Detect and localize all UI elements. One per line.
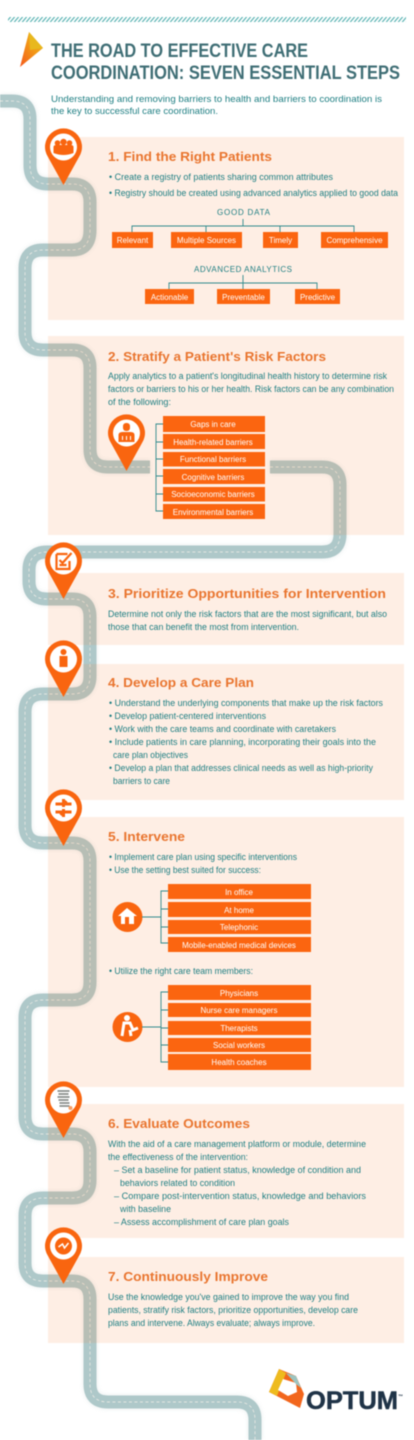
step 7 body: plans and intervene. Always evaluate; always improve. — [108, 1318, 315, 1328]
pin 1: patients icon — [45, 128, 82, 185]
step 1 bullets: • Registry should be created using advanced analytics applied to good data — [109, 188, 398, 198]
intro text: the key to successful care coordination. — [51, 106, 218, 116]
settings list — [142, 884, 311, 952]
advanced analytics chart — [145, 265, 340, 304]
risk factor list: Gaps in care — [190, 420, 236, 429]
step 3 body — [108, 609, 387, 632]
step 6 body — [108, 1139, 367, 1227]
settings list: Mobile-enabled medical devices — [182, 941, 296, 950]
step 1 — [108, 149, 398, 304]
intro text — [51, 94, 382, 116]
risk factor list: Environmental barriers — [173, 508, 253, 517]
step 5 bullets — [109, 852, 298, 976]
step 6 — [108, 1116, 367, 1227]
step 3 — [108, 586, 387, 632]
step 5 bullets: • Implement care plan using specific interventions — [109, 852, 298, 862]
step 5 — [108, 829, 311, 1070]
pin 6: evaluation checklist icon — [45, 1081, 82, 1138]
step 5 bullets: • Use the setting best suited for success: — [109, 865, 261, 875]
step 6 body: behaviors related to condition — [120, 1178, 235, 1188]
good data chart: Relevant — [117, 236, 149, 245]
step 4 bullets: care plan objectives — [113, 750, 189, 760]
step 7 — [108, 1269, 358, 1328]
good data chart — [112, 208, 388, 248]
step 2 body — [108, 371, 394, 407]
step 6 body: – Set a baseline for patient status, knowledge of condition and — [114, 1165, 361, 1175]
step 5 bullets: • Utilize the right care team members: — [109, 966, 253, 976]
step 1 heading: 1. Find the Right Patients — [108, 149, 272, 164]
pin 3: checklist icon — [45, 542, 82, 599]
care team list — [142, 985, 311, 1070]
step 2 heading: 2. Stratify a Patient's Risk Factors — [108, 349, 326, 364]
risk factor list: Cognitive barriers — [182, 473, 244, 482]
advanced analytics chart: Predictive — [300, 293, 336, 302]
step 4 bullets: barriers to care — [113, 776, 170, 786]
advanced analytics chart: ADVANCED ANALYTICS — [194, 265, 292, 274]
Optum logo: OPTUM — [306, 1387, 398, 1415]
settings list: At home — [224, 906, 254, 915]
step 6 body: the effectiveness of the intervention: — [108, 1152, 248, 1162]
settings list: Telephonic — [220, 923, 258, 932]
step 4 bullets — [109, 698, 384, 786]
care team list: Health coaches — [211, 1058, 267, 1067]
care team list: Social workers — [213, 1041, 265, 1050]
advanced analytics chart: Preventable — [222, 293, 265, 302]
icon: home setting — [112, 902, 142, 932]
good data chart: Comprehensive — [326, 236, 383, 245]
title — [51, 40, 400, 84]
step 6 body: – Compare post-intervention status, knowledge and behaviors — [114, 1191, 367, 1201]
step 4 heading: 4. Develop a Care Plan — [108, 675, 254, 690]
risk factor list — [156, 416, 265, 519]
step 7 body: Use the knowledge you've gained to improve the way you find — [108, 1292, 349, 1302]
risk factor list: Health-related barriers — [173, 438, 253, 447]
care team list: Therapists — [220, 1024, 258, 1033]
good data chart: Multiple Sources — [177, 236, 236, 245]
Optum logo: ™ — [398, 1394, 403, 1400]
step 2 body: of the following: — [108, 397, 171, 407]
icon: care team member — [112, 1012, 142, 1042]
step 2 body: Apply analytics to a patient's longitudinal health history to determine risk — [108, 371, 388, 381]
step 6 body: with baseline — [119, 1204, 171, 1214]
step 6 body: With the aid of a care management platform or module, determine — [108, 1139, 366, 1149]
good data chart: GOOD DATA — [217, 208, 271, 217]
intro text: Understanding and removing barriers to health and barriers to coordination is — [51, 94, 382, 104]
step 3 heading: 3. Prioritize Opportunities for Intervention — [108, 586, 386, 601]
step 6 heading: 6. Evaluate Outcomes — [108, 1116, 250, 1131]
step 1 bullets — [109, 172, 398, 198]
step 4 bullets: • Include patients in care planning, incorporating their goals into the — [109, 737, 376, 747]
pin 5: arrows icon — [45, 789, 82, 846]
step 4 bullets: • Develop a plan that addresses clinical needs as well as high-priority — [109, 763, 374, 773]
settings list: In office — [225, 888, 253, 897]
step 4 — [108, 675, 384, 786]
road — [0, 101, 340, 1440]
step 5 heading: 5. Intervene — [108, 829, 185, 844]
Optum logo — [269, 1369, 403, 1415]
risk factor list: Functional barriers — [180, 455, 246, 464]
step 4 bullets: • Develop patient-centered interventions — [109, 711, 267, 721]
step 3 body: Determine not only the risk factors that are the most significant, but also — [108, 609, 387, 619]
title: THE ROAD TO EFFECTIVE CARE — [51, 40, 308, 62]
panel: backgrounds — [48, 137, 404, 1343]
step 4 bullets: • Work with the care teams and coordinate with caretakers — [109, 724, 337, 734]
good data chart: Timely — [269, 236, 292, 245]
step 7 body — [108, 1292, 358, 1328]
care team list: Nurse care managers — [201, 1006, 277, 1015]
step 6 body: – Assess accomplishment of care plan goals — [114, 1217, 290, 1227]
top hatched stripe — [8, 17, 406, 22]
care team list: Physicians — [220, 989, 258, 998]
pin 7: improvement cycle icon — [45, 1227, 82, 1284]
pin 2: clinician icon — [108, 414, 145, 471]
advanced analytics chart: Actionable — [151, 293, 189, 302]
step 7 heading: 7. Continuously Improve — [108, 1269, 268, 1284]
risk factor list: Socioeconomic barriers — [171, 490, 255, 499]
icon: top logo flame — [20, 32, 43, 67]
step 3 body: those that can benefit the most from intervention. — [108, 622, 299, 632]
step 2 body: factors or barriers to his or her health. Risk factors can be any combination — [108, 384, 394, 394]
step 4 bullets: • Understand the underlying components that make up the risk factors — [109, 698, 384, 708]
step 7 body: patients, stratify risk factors, prioritize opportunities, develop care — [108, 1305, 358, 1315]
pin 4: care plan icon — [45, 640, 82, 697]
step 1 bullets: • Create a registry of patients sharing common attributes — [109, 172, 334, 182]
step 2 — [108, 349, 394, 519]
